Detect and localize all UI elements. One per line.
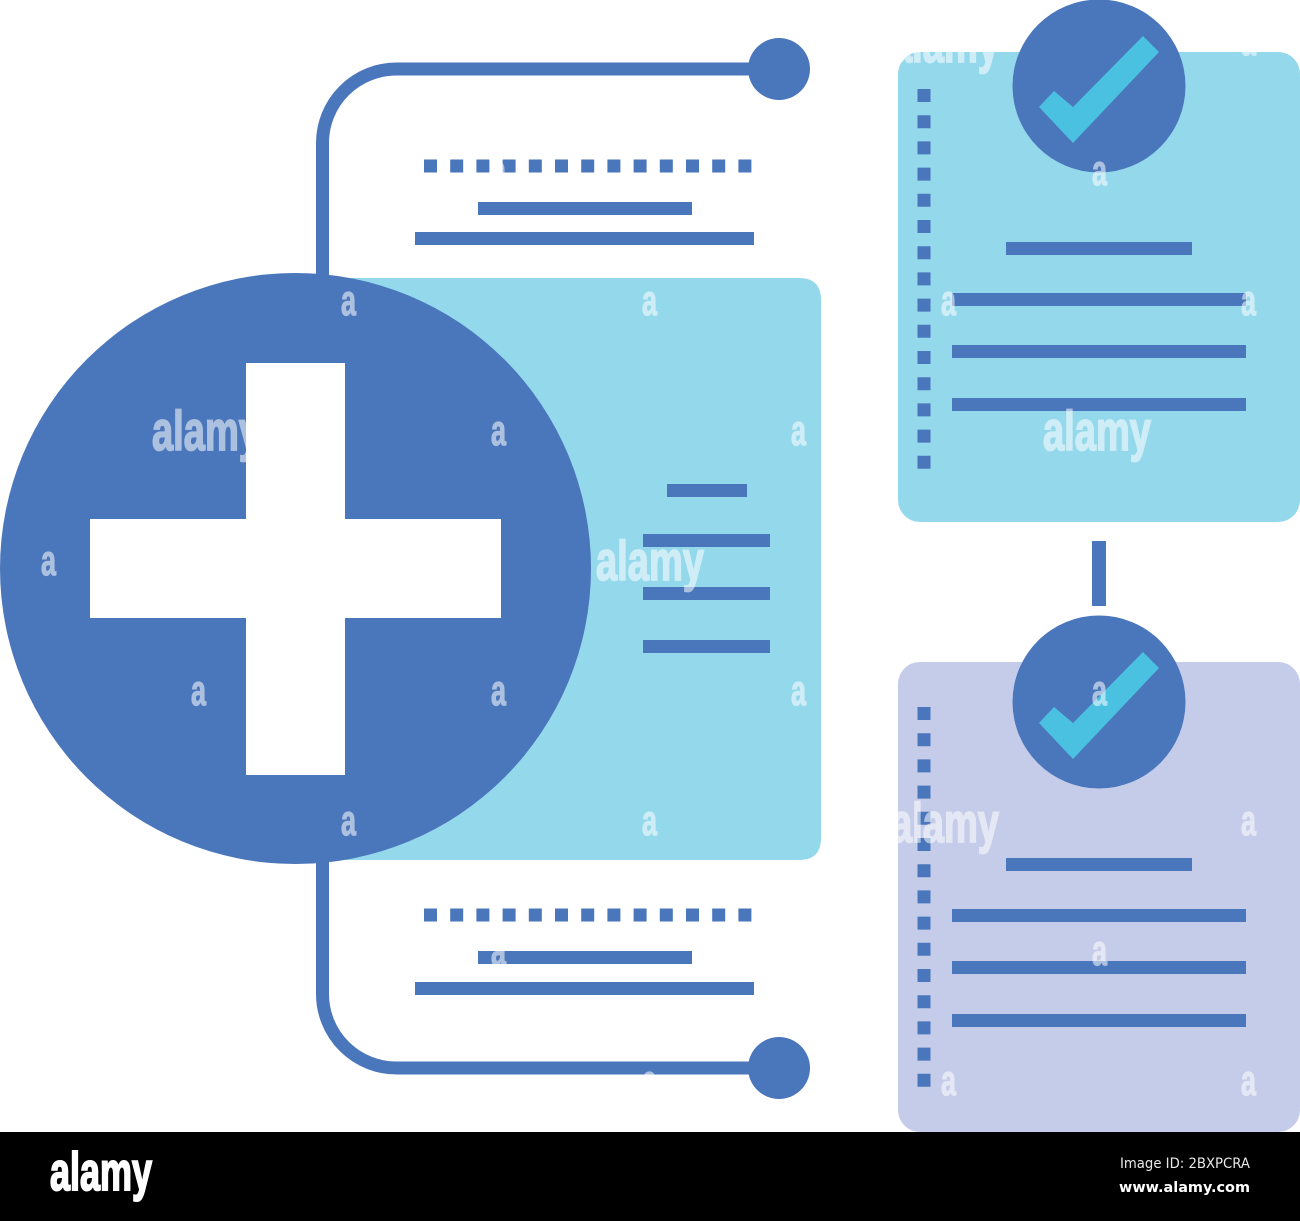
watermark text: a xyxy=(1092,147,1108,195)
watermark text: a xyxy=(791,667,807,715)
top connector with dot xyxy=(322,38,810,280)
panel: central light blue card xyxy=(300,278,821,860)
watermark text: a xyxy=(1241,1057,1257,1105)
bottom text lines xyxy=(415,915,754,995)
watermark text: a xyxy=(1241,277,1257,325)
footer url: www.alamy.com xyxy=(1119,1180,1250,1196)
watermark text: alamy xyxy=(891,11,999,74)
footer bar xyxy=(0,1132,1300,1221)
watermark text: a xyxy=(791,407,807,455)
watermark text: alamy xyxy=(1043,399,1151,462)
watermark text: a xyxy=(1092,667,1108,715)
watermark text: a xyxy=(191,667,207,715)
watermark text: a xyxy=(642,1057,658,1105)
bottom connector with dot xyxy=(322,858,810,1099)
watermark text: a xyxy=(941,277,957,325)
watermark text: a xyxy=(1241,797,1257,845)
watermark text: a xyxy=(1092,927,1108,975)
watermark text: a xyxy=(491,667,507,715)
watermark text: a xyxy=(941,1057,957,1105)
watermark text: a xyxy=(642,277,658,325)
watermark text: a xyxy=(41,537,57,585)
watermark text: alamy xyxy=(152,399,260,462)
panel: bottom checklist document xyxy=(898,616,1300,1132)
top text lines xyxy=(415,166,754,245)
footer logo: alamy xyxy=(50,1142,152,1202)
panel: top checklist document xyxy=(898,0,1300,522)
watermark text: a xyxy=(491,407,507,455)
connector between documents xyxy=(1092,541,1106,606)
watermark text: a xyxy=(491,927,507,975)
watermark text: alamy xyxy=(596,529,704,592)
image id: Image ID: 2BXPCRA xyxy=(1120,1156,1250,1172)
watermark text: a xyxy=(642,797,658,845)
watermark text: alamy xyxy=(891,791,999,854)
watermark text: a xyxy=(1241,17,1257,65)
watermark text: a xyxy=(341,277,357,325)
watermark text: a xyxy=(491,147,507,195)
watermark text: a xyxy=(341,797,357,845)
icon: medical cross circle xyxy=(0,273,591,864)
